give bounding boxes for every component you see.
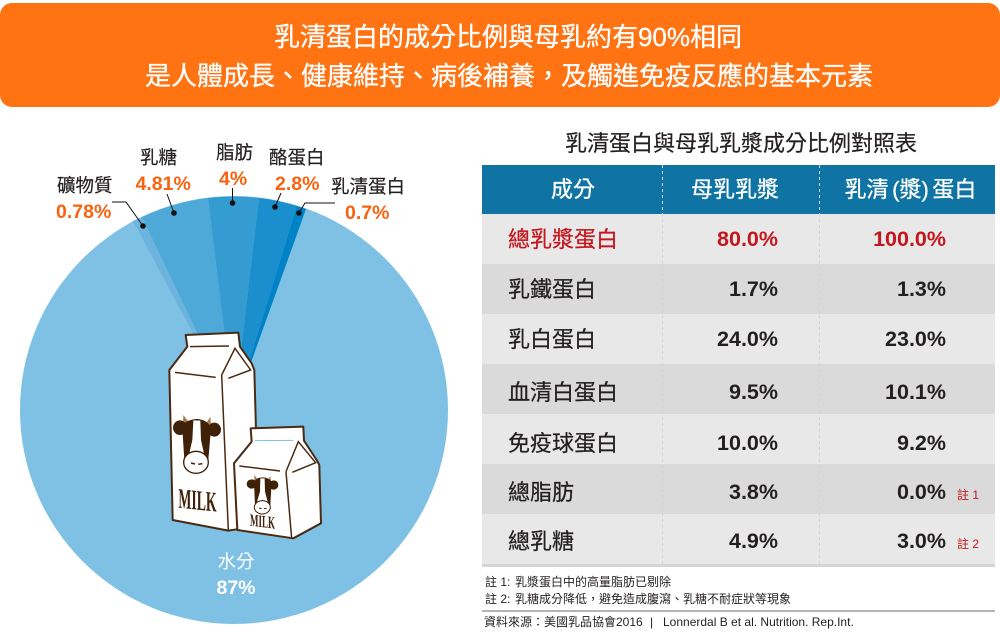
icon: large milk carton bbox=[169, 333, 257, 531]
row: serum albumin: 血清白蛋白 bbox=[508, 380, 618, 405]
icon: small milk carton: MILK bbox=[250, 511, 275, 533]
label: water: 87% bbox=[216, 577, 256, 599]
footnotes: 註 2: bbox=[485, 592, 510, 606]
table header row bbox=[482, 165, 995, 214]
row: immunoglobulin: 9.2% bbox=[897, 431, 946, 455]
footnotes bbox=[485, 574, 791, 606]
row: lactoferrin: 乳鐵蛋白 bbox=[508, 277, 596, 302]
row: immunoglobulin bbox=[482, 414, 995, 464]
label: casein: 酪蛋白 bbox=[269, 147, 325, 168]
label: minerals: 0.78% bbox=[56, 201, 111, 223]
row: serum albumin: 10.1% bbox=[885, 380, 946, 404]
label: whey protein: 0.7% bbox=[345, 202, 389, 224]
row: total whey protein: 80.0% bbox=[717, 227, 778, 251]
label: lactose bbox=[136, 147, 191, 216]
icon: small cow face bbox=[247, 475, 278, 514]
label: whey protein: 乳清蛋白 bbox=[331, 176, 405, 197]
row: total lactose: 總乳糖 bbox=[508, 529, 574, 554]
title banner: 乳清蛋白的成分比例與母乳約有90%相同 bbox=[274, 22, 742, 52]
table header row: 乳清 (漿) 蛋白 bbox=[845, 177, 976, 202]
label: casein: 2.8% bbox=[275, 173, 319, 195]
row: total whey protein: 總乳漿蛋白 bbox=[508, 227, 618, 252]
row: serum albumin: 9.5% bbox=[729, 380, 778, 404]
row: total fat: 3.8% bbox=[729, 480, 778, 504]
row: total whey protein: 100.0% bbox=[873, 227, 946, 251]
title banner: 是人體成長、健康維持、病後補養，及觸進免疫反應的基本元素 bbox=[145, 61, 873, 91]
label: water: 水分 bbox=[217, 551, 255, 572]
label: water bbox=[216, 551, 256, 599]
row: lactoferrin: 1.7% bbox=[729, 277, 778, 301]
table header row: 成分 bbox=[551, 177, 595, 202]
source line: Lonnerdal B et al. Nutrition. Rep.Int. bbox=[663, 615, 854, 629]
slice: water 87% bbox=[20, 196, 448, 624]
icon: cow face bbox=[173, 415, 221, 473]
row: alpha-lactalbumin: 乳白蛋白 bbox=[508, 327, 596, 352]
table header row: 母乳乳漿 bbox=[691, 177, 779, 202]
slice: fat 4% bbox=[208, 196, 259, 410]
row: serum albumin bbox=[482, 364, 995, 414]
icon: milk cartons bbox=[169, 333, 321, 538]
label: casein bbox=[269, 147, 325, 210]
label: whey protein bbox=[296, 176, 405, 224]
label: minerals bbox=[56, 175, 146, 229]
row: total lactose: 3.0% bbox=[897, 529, 946, 553]
row: total fat: 註 1 bbox=[957, 488, 979, 502]
slice: minerals 0.78% bbox=[133, 217, 234, 410]
row: alpha-lactalbumin: 23.0% bbox=[885, 327, 946, 351]
label: fat: 脂肪 bbox=[216, 142, 253, 163]
row: immunoglobulin: 免疫球蛋白 bbox=[508, 431, 618, 456]
pie chart bbox=[20, 196, 448, 624]
row: total fat: 總脂肪 bbox=[508, 480, 574, 505]
source line: 資料來源：美國乳品協會2016 bbox=[484, 615, 643, 629]
label: lactose: 4.81% bbox=[136, 173, 191, 195]
slice: casein 2.8% bbox=[234, 198, 297, 410]
label: lactose: 乳糖 bbox=[140, 147, 177, 168]
comparison table bbox=[482, 165, 995, 567]
footnotes: 乳糖成分降低，避免造成腹瀉、乳糖不耐症狀等現象 bbox=[515, 591, 791, 606]
footnotes: 乳漿蛋白中的高量脂肪已剔除 bbox=[515, 574, 671, 589]
row: total fat: 0.0% bbox=[897, 480, 946, 504]
slice: whey protein 0.7% bbox=[234, 206, 306, 410]
footnotes: 註 1: bbox=[485, 575, 510, 589]
row: alpha-lactalbumin: 24.0% bbox=[717, 327, 778, 351]
row: total lactose bbox=[482, 514, 995, 564]
slice: lactose 4.81% bbox=[142, 198, 234, 410]
row: total lactose: 4.9% bbox=[729, 529, 778, 553]
row: immunoglobulin: 10.0% bbox=[717, 431, 778, 455]
source line: | bbox=[650, 615, 653, 629]
row: lactoferrin: 1.3% bbox=[897, 277, 946, 301]
label: fat: 4% bbox=[219, 168, 247, 190]
label: fat bbox=[216, 142, 253, 206]
row: total lactose: 註 2 bbox=[957, 537, 979, 551]
table heading: 乳清蛋白與母乳乳漿成分比例對照表 bbox=[565, 131, 917, 156]
title banner bbox=[0, 3, 1000, 107]
icon: large milk carton: MILK bbox=[178, 484, 217, 519]
row: alpha-lactalbumin bbox=[482, 314, 995, 364]
icon: small milk carton bbox=[234, 427, 321, 538]
label: minerals: 礦物質 bbox=[57, 175, 113, 196]
row: total fat bbox=[482, 464, 995, 514]
row: total whey protein bbox=[482, 214, 995, 264]
row: lactoferrin bbox=[482, 264, 995, 314]
